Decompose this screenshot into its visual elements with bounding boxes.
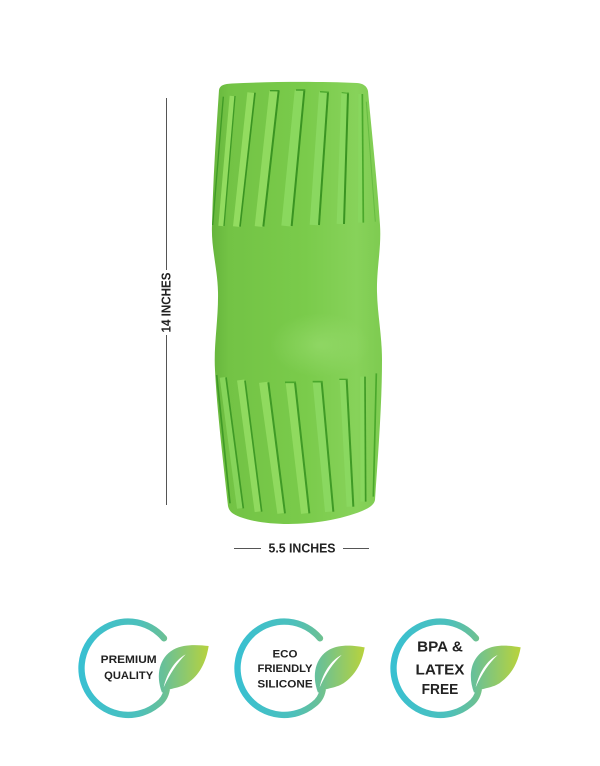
dimension: width 5.5 inches: 5.5 INCHES bbox=[268, 540, 336, 556]
label bbox=[415, 640, 465, 698]
ring and stem bbox=[82, 622, 167, 715]
sleeve body bbox=[212, 82, 382, 524]
leaf vein bbox=[164, 654, 186, 687]
label: FRIENDLY bbox=[257, 663, 313, 675]
dimension: width 5.5 inches bbox=[234, 540, 369, 556]
label: BPA & bbox=[417, 640, 463, 656]
ring and stem bbox=[394, 622, 479, 715]
waist highlight bbox=[270, 313, 370, 377]
leaf bbox=[315, 646, 365, 693]
leaf vein bbox=[476, 655, 498, 687]
bottom grooves bbox=[217, 373, 376, 513]
top grooves bbox=[213, 90, 375, 227]
badge: eco friendly silicone bbox=[238, 622, 365, 715]
leaf vein bbox=[320, 655, 342, 687]
badge: premium quality bbox=[82, 622, 209, 715]
label: FREE bbox=[422, 682, 458, 698]
leaf bbox=[159, 645, 209, 693]
dimension: height 14 inches: 14 INCHES bbox=[158, 272, 174, 332]
badge: bpa and latex free bbox=[394, 622, 521, 715]
label bbox=[257, 648, 313, 690]
product: green silicone sleeve bbox=[212, 82, 382, 524]
label: PREMIUM bbox=[101, 654, 157, 666]
ring and stem bbox=[238, 622, 323, 715]
label: QUALITY bbox=[104, 670, 154, 682]
label: ECO bbox=[272, 648, 298, 660]
label: LATEX bbox=[415, 663, 465, 679]
label bbox=[101, 654, 157, 682]
leaf bbox=[471, 646, 521, 693]
label: SILICONE bbox=[257, 678, 313, 690]
